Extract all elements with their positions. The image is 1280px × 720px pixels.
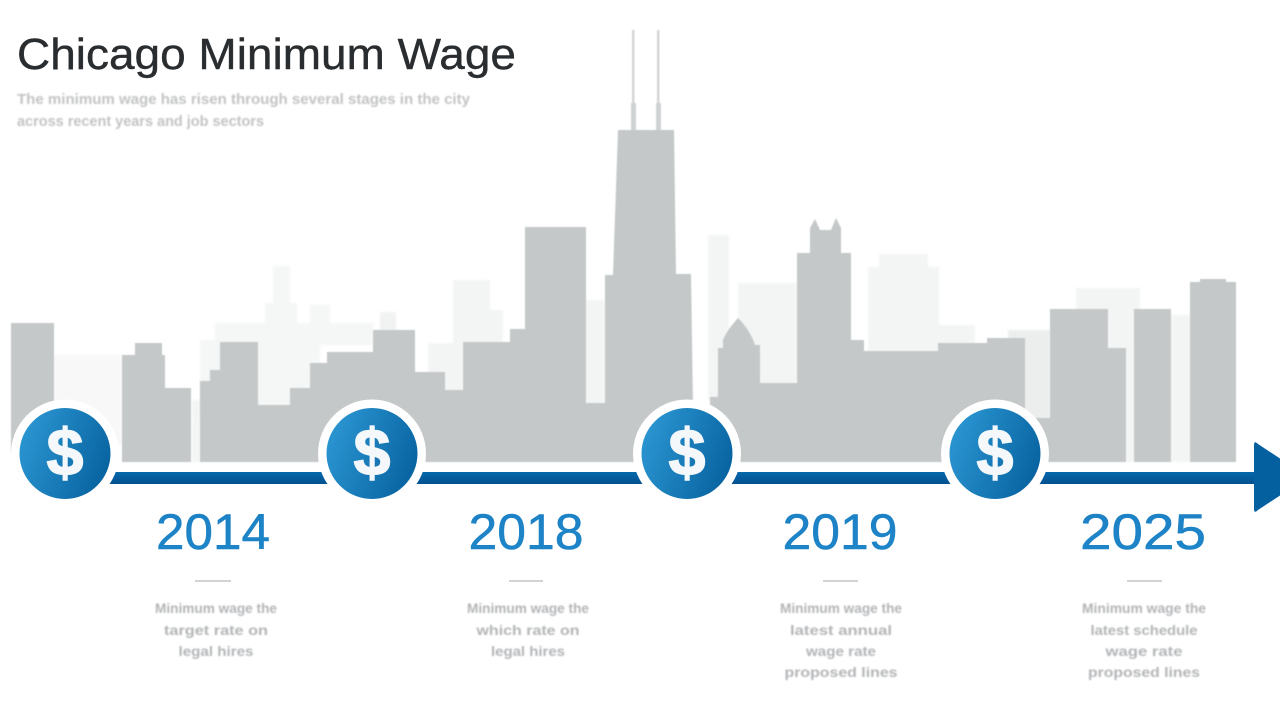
milestone 2019: proposed lines [784, 664, 898, 680]
title: Chicago Minimum Wage [17, 30, 516, 79]
subtitle text block [17, 92, 470, 130]
marker 2019: dollar coin [633, 400, 741, 508]
foreground skyline: dark buildings [11, 130, 1236, 462]
milestone 2018 [467, 504, 589, 659]
milestone 2018: which rate on [475, 622, 580, 638]
building: right narrow tower [1134, 309, 1171, 462]
timeline arrow [65, 442, 1280, 512]
building: far right tower [1190, 279, 1236, 462]
milestone 2019: Minimum wage the [780, 600, 902, 616]
background skyline: light buildings [54, 235, 1190, 462]
marker 2025: dollar coin: $ [977, 415, 1013, 489]
marker 2018: dollar coin: $ [354, 415, 390, 489]
milestone 2025: proposed lines [1088, 664, 1200, 680]
subtitle text block: across recent years and job sectors [17, 114, 264, 130]
milestone 2014: Minimum wage the [155, 600, 277, 616]
milestone 2025 [1080, 504, 1206, 680]
milestone 2014: target rate on [164, 622, 268, 638]
milestone 2025: latest schedule [1090, 622, 1198, 638]
marker 2025: dollar coin [941, 400, 1049, 508]
milestone 2025: wage rate [1104, 643, 1183, 659]
antennas [631, 30, 661, 131]
milestone 2018: Minimum wage the [467, 600, 589, 616]
building: far left tower [11, 323, 54, 453]
milestone 2019: wage rate [805, 643, 876, 659]
subtitle text block: The minimum wage has risen through several stages in the city [17, 92, 470, 108]
milestone 2018: legal hires [491, 643, 565, 659]
milestone 2014 [155, 504, 277, 659]
milestone 2019: 2019 [782, 504, 898, 560]
milestone 2019: latest annual [790, 622, 892, 638]
milestone 2014: legal hires [178, 643, 254, 659]
milestone 2018: 2018 [468, 504, 584, 560]
milestone 2014: 2014 [156, 504, 270, 560]
marker 2019: dollar coin: $ [669, 415, 705, 489]
milestone 2025: Minimum wage the [1082, 600, 1206, 616]
marker 2014: dollar coin: $ [47, 415, 83, 489]
buildings: central mass with Willis Tower [200, 130, 1126, 462]
marker 2014: dollar coin [11, 400, 119, 508]
building: left block [122, 343, 191, 462]
marker 2018: dollar coin [318, 400, 426, 508]
milestone 2019 [780, 504, 902, 680]
milestone 2025: 2025 [1080, 504, 1206, 560]
